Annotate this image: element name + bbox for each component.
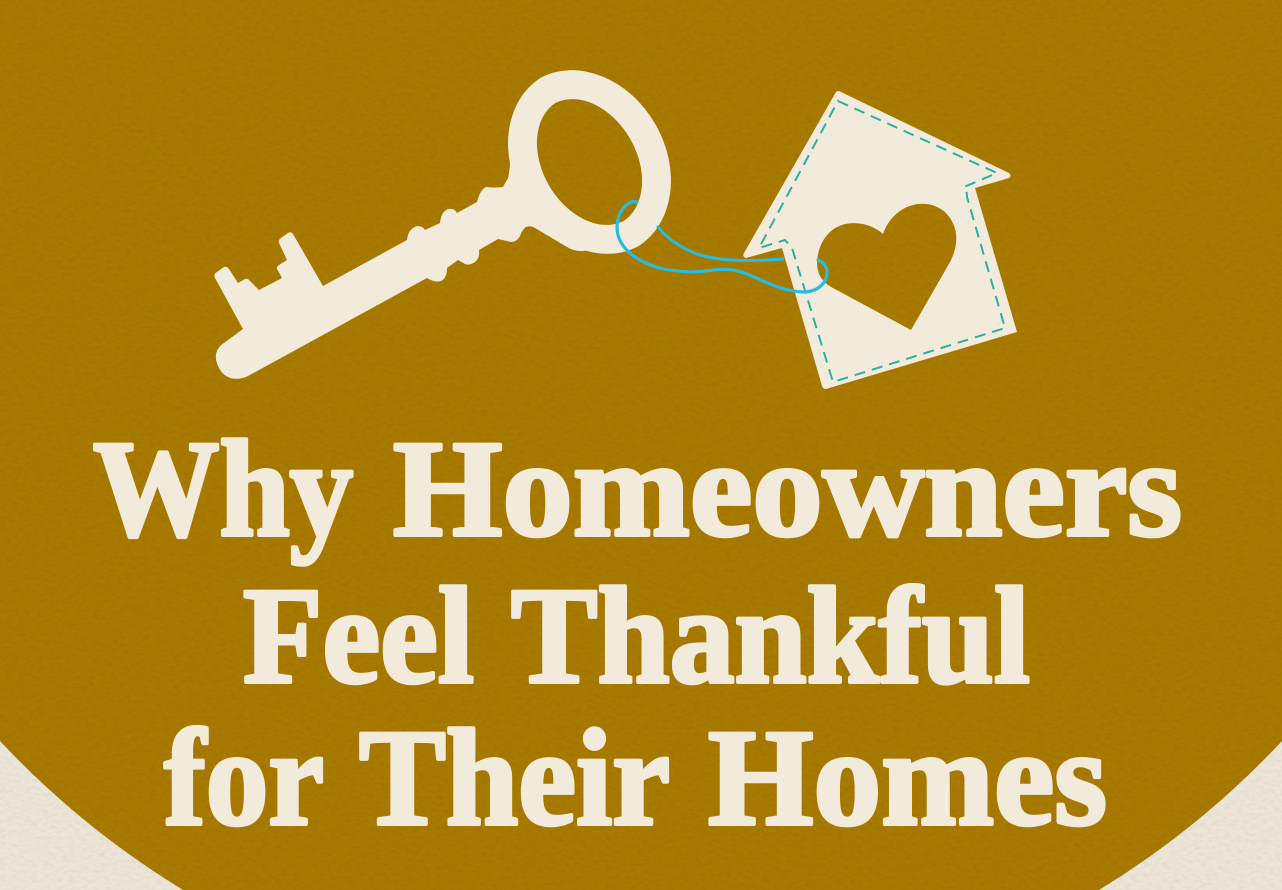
title line 2: Feel [243,559,474,712]
title line 2: Thankful [511,559,1030,712]
key shaft and teeth [214,150,585,379]
title line 3: Their [359,701,670,854]
blue thread: loop strand [617,202,827,292]
title line 1: Why [93,412,353,565]
title line 1: Homeowners [393,412,1182,565]
title line 3: Homes [708,701,1107,854]
icon: key with ring bow [214,70,671,379]
stitched dashed outline on house tag [759,101,1005,382]
title line 3: for [164,701,324,854]
title line 2 [243,559,1030,712]
title [93,412,1182,854]
blue thread: upper strand [658,227,783,260]
title line 3 [164,701,1107,854]
key ring bow [508,70,671,254]
icon: house tag with heart cut-out [743,91,1017,389]
